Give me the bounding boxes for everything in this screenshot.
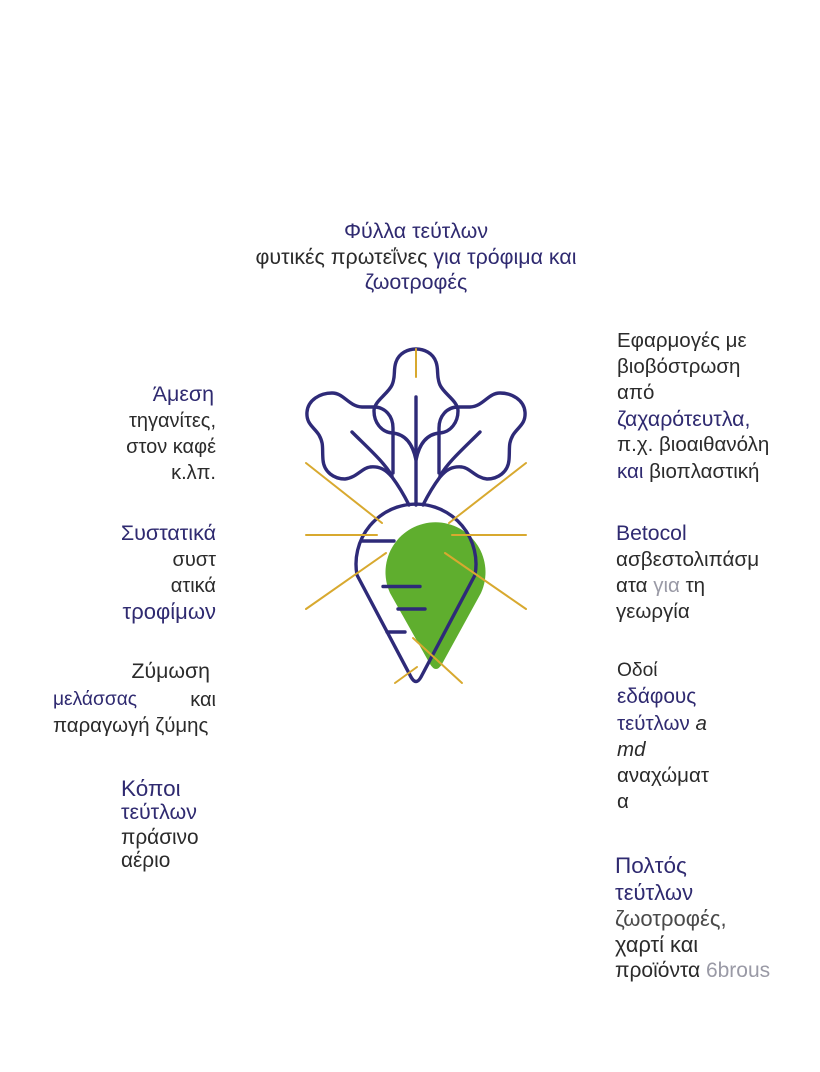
right text: soil: τεύτλων a (617, 712, 707, 735)
right text: soil: md (617, 738, 645, 761)
leaves (307, 349, 525, 505)
title: beet leaves: Φύλλα τεύτλων (344, 219, 488, 243)
left text: food ingredients: Συστατικά (121, 521, 216, 545)
right text: biorefinery: και βιοπλαστική (617, 460, 759, 483)
left text: beet pulp gas: τεύτλων (121, 800, 197, 824)
right text: beet pulp: ζωοτροφές, (615, 906, 727, 931)
right text: biorefinery: από (617, 381, 654, 404)
right text: soil: α (617, 790, 629, 813)
left text: direct use: Άμεση (153, 382, 214, 406)
right text: beet pulp (615, 853, 770, 982)
right text: biorefinery: ζαχαρότευτλα, (617, 407, 750, 431)
right text: Betocol: ατα για τη (616, 574, 705, 597)
right text: soil: Οδοί (617, 660, 658, 681)
rays (306, 349, 526, 683)
left text: molasses fermentation: παραγωγή ζύμης (53, 715, 208, 737)
left text: beet pulp gas: αέριο (121, 849, 170, 872)
left text: direct use (126, 382, 216, 484)
left text: food ingredients: συστ (172, 549, 216, 571)
right text: soil (617, 660, 709, 813)
green teardrop (386, 522, 486, 669)
left text: food ingredients: ατικά (171, 575, 216, 597)
right text: beet pulp: προϊόντα 6brous (615, 959, 770, 982)
right text: Betocol: γεωργία (616, 600, 690, 623)
left text: food ingredients (121, 521, 216, 624)
right text: beet pulp: τεύτλων (615, 880, 693, 905)
right text: soil: εδάφους (617, 685, 696, 708)
right text: Betocol (616, 522, 759, 623)
right text: Betocol: ασβεστολιπάσμ (616, 548, 759, 571)
left text: molasses fermentation (53, 659, 216, 737)
title: beet leaves: φυτικές πρωτεΐνες για τρόφιμα και (256, 245, 576, 269)
right text: biorefinery: Εφαρμογές με (617, 329, 747, 352)
left text: direct use: κ.λπ. (171, 462, 216, 484)
left text: molasses fermentation: Ζύμωση (131, 659, 210, 683)
title: beet leaves: ζωοτροφές (365, 270, 467, 294)
right text: biorefinery: βιοβόστρωση (617, 355, 740, 378)
root outline (356, 504, 476, 682)
right text: biorefinery: π.χ. βιοαιθανόλη (617, 433, 769, 456)
right text: soil: αναχώματ (617, 764, 709, 787)
left text: molasses fermentation: και (190, 689, 216, 711)
left text: beet pulp gas: Κόποι (121, 776, 181, 801)
left text: beet pulp gas: πράσινο (121, 826, 199, 849)
right text: Betocol: Betocol (616, 522, 687, 545)
right text: beet pulp: Πολτός (615, 853, 687, 878)
left text: direct use: τηγανίτες, (129, 410, 216, 432)
left text: beet pulp gas (121, 776, 199, 872)
right text: biorefinery (617, 329, 769, 483)
left text: direct use: στον καφέ (126, 436, 216, 458)
right text: beet pulp: χαρτί και (615, 932, 698, 957)
left text: food ingredients: τροφίμων (123, 599, 216, 624)
title: beet leaves (256, 219, 576, 294)
left text: molasses fermentation: μελάσσας (53, 689, 137, 710)
